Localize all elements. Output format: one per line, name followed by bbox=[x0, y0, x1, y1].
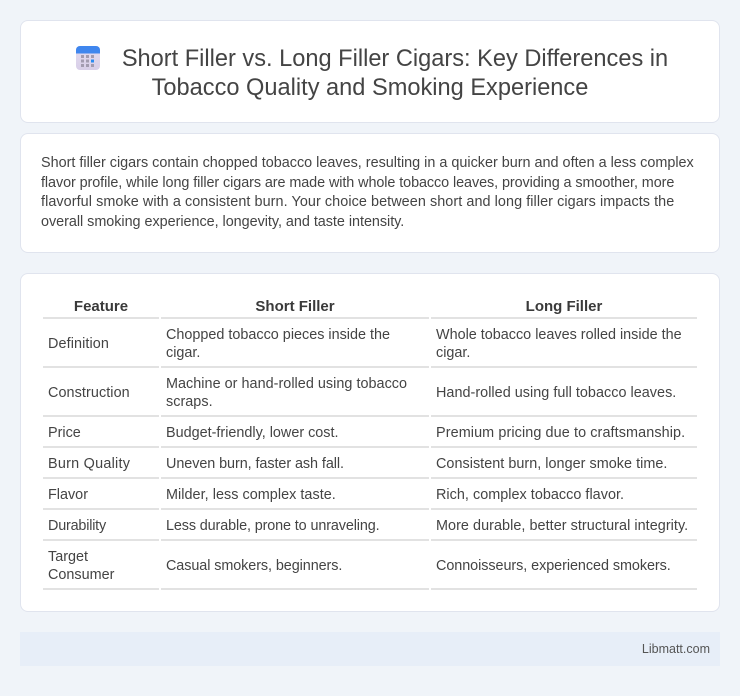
table panel bbox=[20, 273, 720, 612]
table: Long Filler bbox=[526, 298, 602, 315]
table: Hand-rolled using full tobacco leaves. bbox=[436, 385, 676, 401]
table: Premium pricing due to craftsmanship. bbox=[436, 425, 685, 441]
table: Chopped tobacco pieces inside the bbox=[166, 327, 390, 343]
header panel bbox=[20, 20, 720, 123]
intro text: flavorful smoke with a consistent burn. Your choice between short and long filler cigars impacts the bbox=[41, 194, 674, 210]
intro panel bbox=[20, 133, 720, 253]
table: Construction bbox=[48, 385, 130, 401]
table: Target bbox=[48, 549, 88, 565]
table: scraps. bbox=[166, 394, 213, 410]
table: Consumer bbox=[48, 567, 114, 583]
table: Rich, complex tobacco flavor. bbox=[436, 487, 624, 503]
table: Budget-friendly, lower cost. bbox=[166, 425, 338, 441]
table: Short Filler bbox=[255, 298, 335, 315]
table: Machine or hand-rolled using tobacco bbox=[166, 376, 407, 392]
table: Burn Quality bbox=[48, 456, 130, 472]
table bbox=[43, 298, 697, 590]
icon: calendar bbox=[76, 46, 100, 70]
table: Uneven burn, faster ash fall. bbox=[166, 456, 344, 472]
table: cigar. bbox=[166, 345, 200, 361]
table: Durability bbox=[48, 518, 106, 534]
table: Consistent burn, longer smoke time. bbox=[436, 456, 667, 472]
table: Flavor bbox=[48, 487, 88, 503]
table: cigar. bbox=[436, 345, 470, 361]
table: More durable, better structural integrity. bbox=[436, 518, 688, 534]
table: Casual smokers, beginners. bbox=[166, 558, 342, 574]
table: Milder, less complex taste. bbox=[166, 487, 336, 503]
table: Connoisseurs, experienced smokers. bbox=[436, 558, 671, 574]
intro text: Short filler cigars contain chopped tobacco leaves, resulting in a quicker burn and often a less complex bbox=[41, 155, 694, 171]
title: Tobacco Quality and Smoking Experience bbox=[152, 75, 588, 101]
intro text: flavor profile, while long filler cigars are made with whole tobacco leaves, providing a smoother, more bbox=[41, 175, 674, 191]
intro text: overall smoking experience, longevity, and taste intensity. bbox=[41, 214, 404, 230]
intro text bbox=[41, 155, 694, 230]
footer text: Libmatt.com bbox=[642, 642, 710, 656]
table: Definition bbox=[48, 336, 109, 352]
table: Whole tobacco leaves rolled inside the bbox=[436, 327, 682, 343]
table: Less durable, prone to unraveling. bbox=[166, 518, 380, 534]
table: Price bbox=[48, 425, 81, 441]
table: Feature bbox=[74, 298, 128, 315]
footer bar bbox=[20, 632, 720, 666]
title: Short Filler vs. Long Filler Cigars: Key Differences in bbox=[122, 46, 668, 72]
title bbox=[122, 46, 668, 101]
